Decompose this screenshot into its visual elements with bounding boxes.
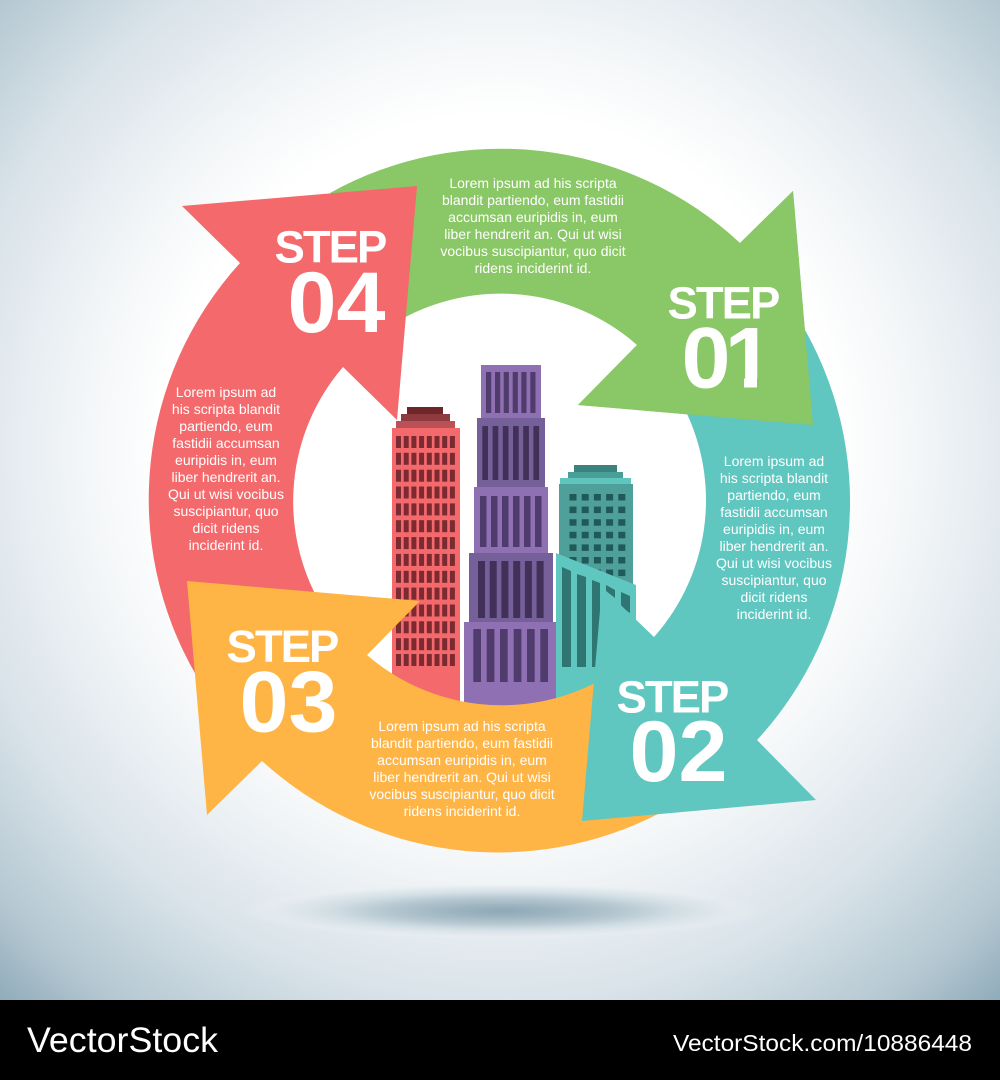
text block: step 01: accumsan euripidis in, eum: [448, 209, 618, 225]
text block: step 04: partiendo, eum: [179, 418, 273, 434]
building: purple tower: [464, 365, 556, 710]
text block: step 01: Lorem ipsum ad his scripta: [449, 175, 617, 191]
step 03 label: [226, 621, 338, 750]
text block: step 02: liber hendrerit an.: [720, 538, 828, 554]
text block: step 01: vocibus suscipiantur, quo dicit: [440, 243, 626, 259]
step 01 label: STEP: [668, 278, 779, 328]
text block: step 02: Qui ut wisi vocibus: [716, 555, 832, 571]
text block: step 03: vocibus suscipiantur, quo dicit: [369, 786, 555, 802]
text block: step 04: inciderint id.: [189, 537, 263, 553]
step 02 label: [616, 672, 728, 800]
step 02 label: STEP: [616, 672, 728, 722]
text block: step 03: accumsan euripidis in, eum: [377, 752, 547, 768]
step 04 label: [274, 222, 386, 351]
text block: step 03: liber hendrerit an. Qui ut wisi: [373, 769, 551, 785]
step 03 label: STEP: [226, 621, 338, 672]
step 02 label: 02: [630, 704, 728, 800]
panel: step 01 arrow (green): [330, 149, 813, 425]
text block: step 04: liber hendrerit an.: [172, 469, 280, 485]
footer logo: VectorStock: [27, 1021, 219, 1060]
text block: step 04: fastidii accumsan: [172, 435, 280, 451]
text block: step 02: dicit ridens: [741, 589, 807, 605]
text block: step 02: euripidis in, eum: [723, 521, 825, 537]
step 01 label: 0: [682, 310, 730, 406]
step 04 label: 04: [288, 255, 386, 351]
step 04 label: STEP: [274, 222, 386, 272]
panel: step 02 arrow (teal): [582, 330, 850, 821]
text block: step 01: blandit partiendo, eum fastidii: [442, 192, 624, 208]
footer url: VectorStock.com/10886448: [673, 1030, 972, 1056]
ground shadow: [241, 883, 765, 939]
text block: step 02: suscipiantur, quo: [721, 572, 827, 588]
text block: step 02: partiendo, eum: [727, 487, 821, 503]
text block: step 01: liber hendrerit an. Qui ut wisi: [444, 226, 622, 242]
text block: step 02: his scripta blandit: [720, 470, 828, 486]
text block: step 03: blandit partiendo, eum fastidii: [371, 735, 553, 751]
building: teal tower: [559, 465, 633, 614]
text block: step 04: dicit ridens: [193, 520, 259, 536]
building: red tower: [392, 407, 460, 704]
text block: step 02: Lorem ipsum ad: [724, 453, 824, 469]
text block: step 04: Qui ut wisi vocibus: [168, 486, 284, 502]
building: teal front block: [556, 553, 636, 700]
text block: step 04: his scripta blandit: [172, 401, 280, 417]
text block: step 01: ridens inciderint id.: [475, 260, 591, 276]
panel: step 04 arrow (red): [149, 186, 417, 675]
panel: step 01 arrow head (green): [578, 191, 813, 425]
text block: step 04: euripidis in, eum: [175, 452, 277, 468]
step 01 label: [668, 286, 779, 388]
footer bar: [0, 1000, 1000, 1080]
text block: step 04: Lorem ipsum ad: [176, 384, 276, 400]
panel: step 03 arrow (orange): [187, 581, 660, 852]
text block: step 03: ridens inciderint id.: [404, 803, 520, 819]
step 03 label: 03: [240, 654, 338, 750]
text block: step 03: Lorem ipsum ad his scripta: [378, 718, 546, 734]
text block: step 02: inciderint id.: [737, 606, 811, 622]
text block: step 02: fastidii accumsan: [720, 504, 828, 520]
text block: step 04: suscipiantur, quo: [173, 503, 279, 519]
step 01 label: 1: [725, 310, 774, 406]
